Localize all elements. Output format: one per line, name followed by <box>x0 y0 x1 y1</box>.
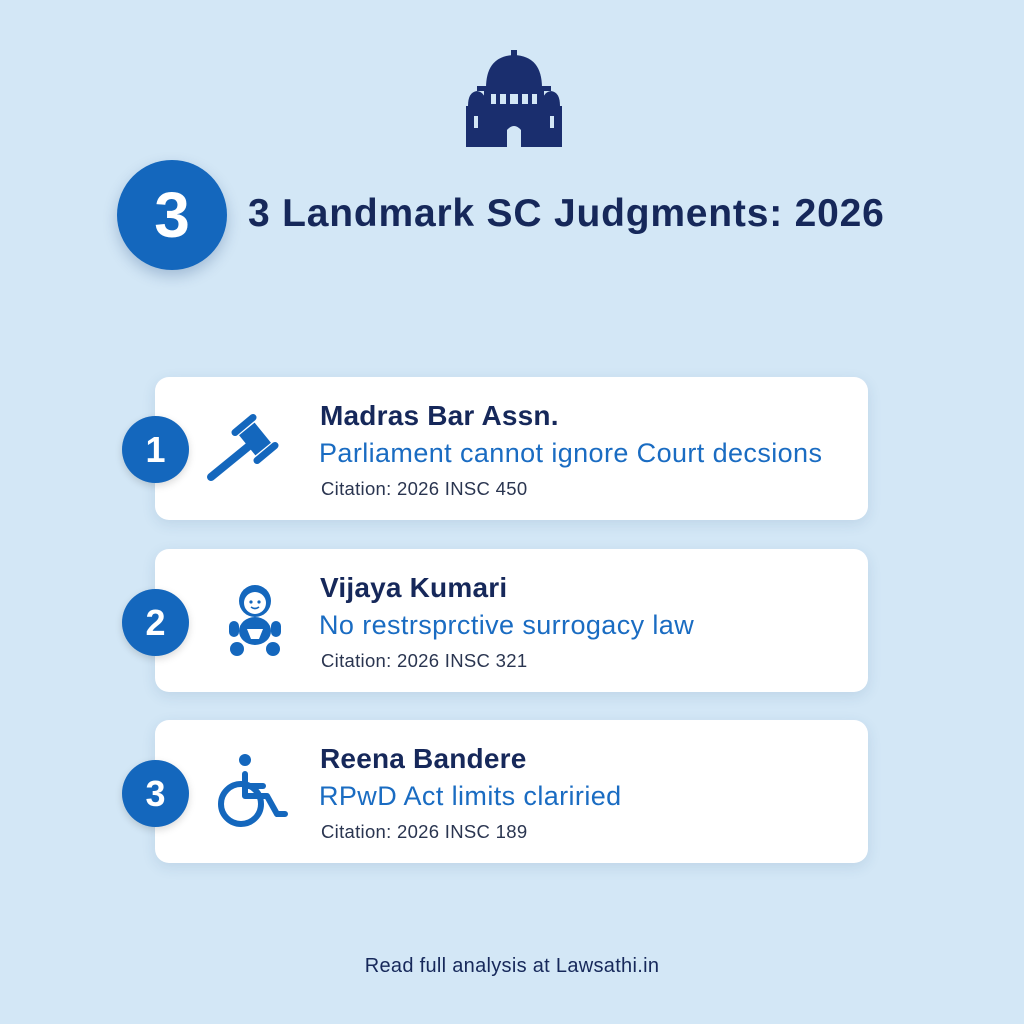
icon: baby <box>229 585 281 656</box>
card 2 <box>155 549 868 692</box>
title badge <box>117 160 227 270</box>
card 1: Parliament cannot ignore Court decsions <box>319 438 822 468</box>
card 1 <box>155 377 868 520</box>
card 3: Reena Bandere <box>320 743 526 774</box>
icon: supreme court building <box>466 50 562 147</box>
icon: wheelchair <box>218 754 288 827</box>
number 1 <box>122 416 189 483</box>
icon: gavel <box>207 414 278 481</box>
card 2: No restrsprctive surrogacy law <box>319 610 694 640</box>
number 3: 3 <box>145 773 166 814</box>
number 3 <box>122 760 189 827</box>
card 2: Vijaya Kumari <box>320 572 507 603</box>
title: 3 Landmark SC Judgments: 2026 <box>248 192 885 235</box>
number 2 <box>122 589 189 656</box>
number 2: 2 <box>145 602 166 643</box>
card 3 <box>155 720 868 863</box>
card 2: Citation: 2026 INSC 321 <box>321 650 527 671</box>
card 1: Madras Bar Assn. <box>320 400 559 431</box>
card 3: Citation: 2026 INSC 189 <box>321 821 527 842</box>
number 1: 1 <box>145 429 166 470</box>
title badge: 3 <box>154 179 190 251</box>
footer: Read full analysis at Lawsathi.in <box>365 955 659 977</box>
card 1: Citation: 2026 INSC 450 <box>321 478 527 499</box>
card 3: RPwD Act limits clariried <box>319 781 622 811</box>
